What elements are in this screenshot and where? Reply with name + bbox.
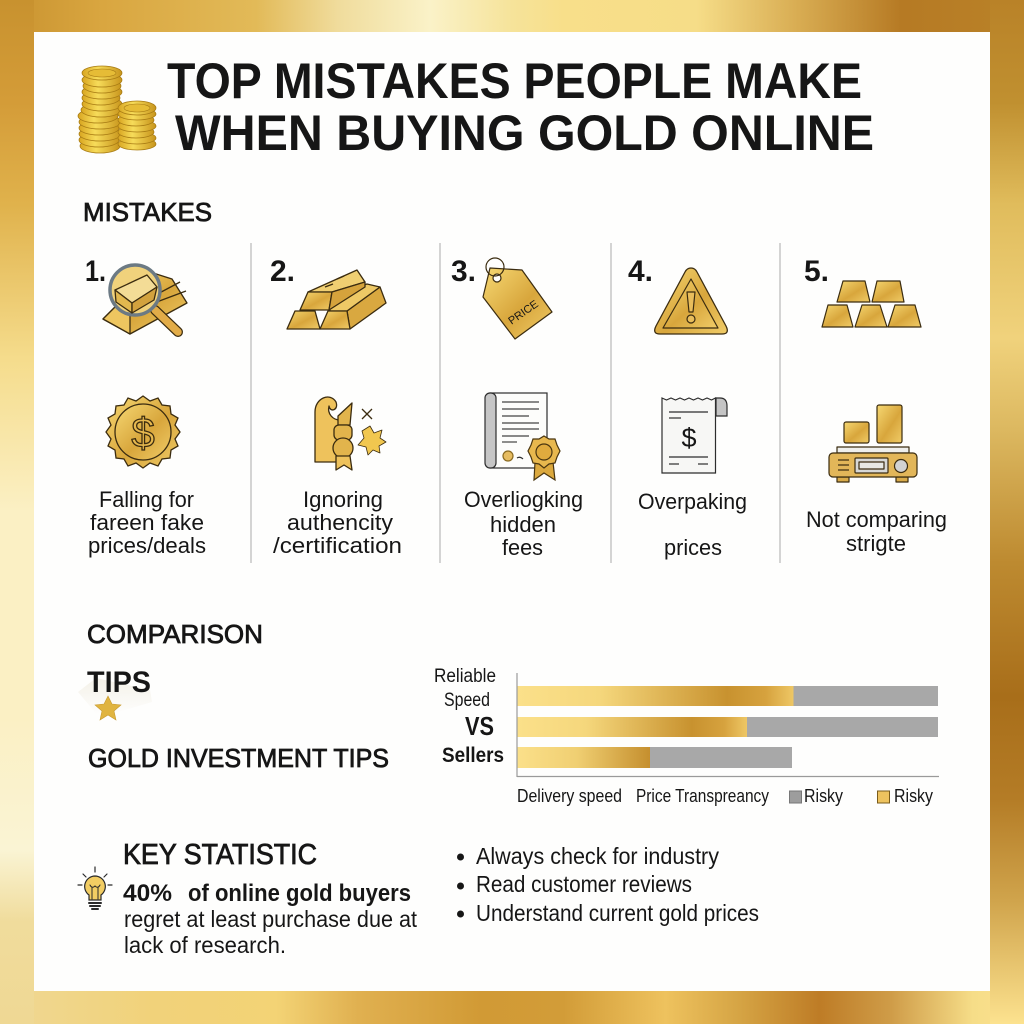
icon: seal with dollar: $	[131, 409, 155, 456]
heading: comparison: COMPARISON	[87, 619, 263, 649]
statistic text	[123, 880, 418, 958]
icon: seal with dollar	[106, 396, 180, 468]
heading: tips with star: TIPS	[87, 666, 151, 699]
comparison bar chart	[434, 666, 939, 806]
panel: mistake 4	[628, 255, 747, 560]
panel: mistake 2	[270, 255, 402, 558]
icon: star	[95, 696, 121, 720]
chart legend	[517, 786, 933, 806]
label 1: fareen fake	[90, 510, 204, 535]
statistic text: lack of research.	[124, 932, 286, 958]
tips bullet list: Read customer reviews	[476, 871, 692, 897]
icon: light bulb	[78, 867, 112, 909]
label 3: Overliogking	[464, 487, 583, 512]
icon: receipt	[662, 398, 727, 473]
label 5	[806, 507, 947, 556]
label 2: authencity	[287, 510, 393, 535]
chart row labels	[434, 666, 504, 767]
statistic text: regret at least purchase due at	[124, 906, 418, 932]
chart row labels: Sellers	[442, 744, 504, 767]
chart legend: Risky	[894, 786, 933, 806]
label 5: Not comparing	[806, 507, 947, 532]
label 2: Ignoring	[303, 487, 383, 512]
label 3: fees	[502, 535, 543, 560]
label 4	[638, 489, 747, 560]
heading: tips with star	[78, 666, 152, 720]
panel: mistake 3	[451, 255, 583, 560]
title	[167, 53, 874, 161]
statistic text: of online gold buyers	[188, 880, 411, 907]
chart legend: Risky	[804, 786, 843, 806]
label 1: prices/deals	[88, 533, 206, 558]
tips bullet list	[457, 843, 759, 926]
icon: gold bar stack	[287, 270, 386, 329]
icon: contract with seal	[485, 393, 560, 480]
label 4: prices	[664, 535, 722, 560]
label 4: Overpaking	[638, 489, 747, 514]
number 1: 1.	[85, 255, 106, 288]
icon: gold bars with magnifier	[103, 265, 187, 334]
chart row labels: VS	[465, 711, 494, 741]
title: WHEN BUYING GOLD ONLINE	[175, 105, 874, 161]
icon: coin stacks	[78, 66, 156, 153]
heading: mistakes: MISTAKES	[83, 197, 212, 227]
chart row labels: Reliable	[434, 666, 496, 687]
icon: price tag: PRICE	[506, 298, 541, 327]
number 5: 5.	[804, 255, 829, 288]
panel: mistake 1	[85, 255, 206, 558]
title: TOP MISTAKES PEOPLE MAKE	[167, 53, 862, 109]
label 5: strigte	[846, 531, 906, 556]
label 2	[273, 487, 402, 558]
number 2: 2.	[270, 255, 295, 288]
number 4: 4.	[628, 255, 653, 288]
icon: receipt: $	[681, 423, 697, 453]
label 3: hidden	[490, 512, 556, 537]
heading: gold investment tips: GOLD INVESTMENT TIPS	[88, 743, 389, 773]
statistic text: 40%	[123, 880, 172, 907]
chart legend: Delivery speed	[517, 786, 622, 806]
icon: certificate with rosette	[315, 397, 386, 470]
label 1: Falling for	[99, 487, 194, 512]
heading: key statistic: KEY STATISTIC	[123, 839, 317, 871]
panel: key statistic	[78, 839, 418, 958]
icon: warning triangle	[655, 268, 727, 334]
panel: mistake 5	[804, 255, 947, 556]
label 3	[464, 487, 583, 560]
icon: gold ingots	[822, 281, 921, 327]
bars	[517, 686, 938, 768]
chart legend: Price Transpreancy	[636, 786, 769, 806]
icon: gold on a scale	[829, 405, 917, 482]
label 2: /certification	[273, 533, 402, 558]
column dividers	[251, 243, 780, 563]
tips bullet list: Always check for industry	[476, 843, 719, 869]
chart row labels: Speed	[444, 690, 490, 711]
label 1	[88, 487, 206, 558]
icon: price tag	[483, 258, 552, 339]
tips bullet list: Understand current gold prices	[476, 900, 759, 926]
number 3: 3.	[451, 255, 476, 288]
